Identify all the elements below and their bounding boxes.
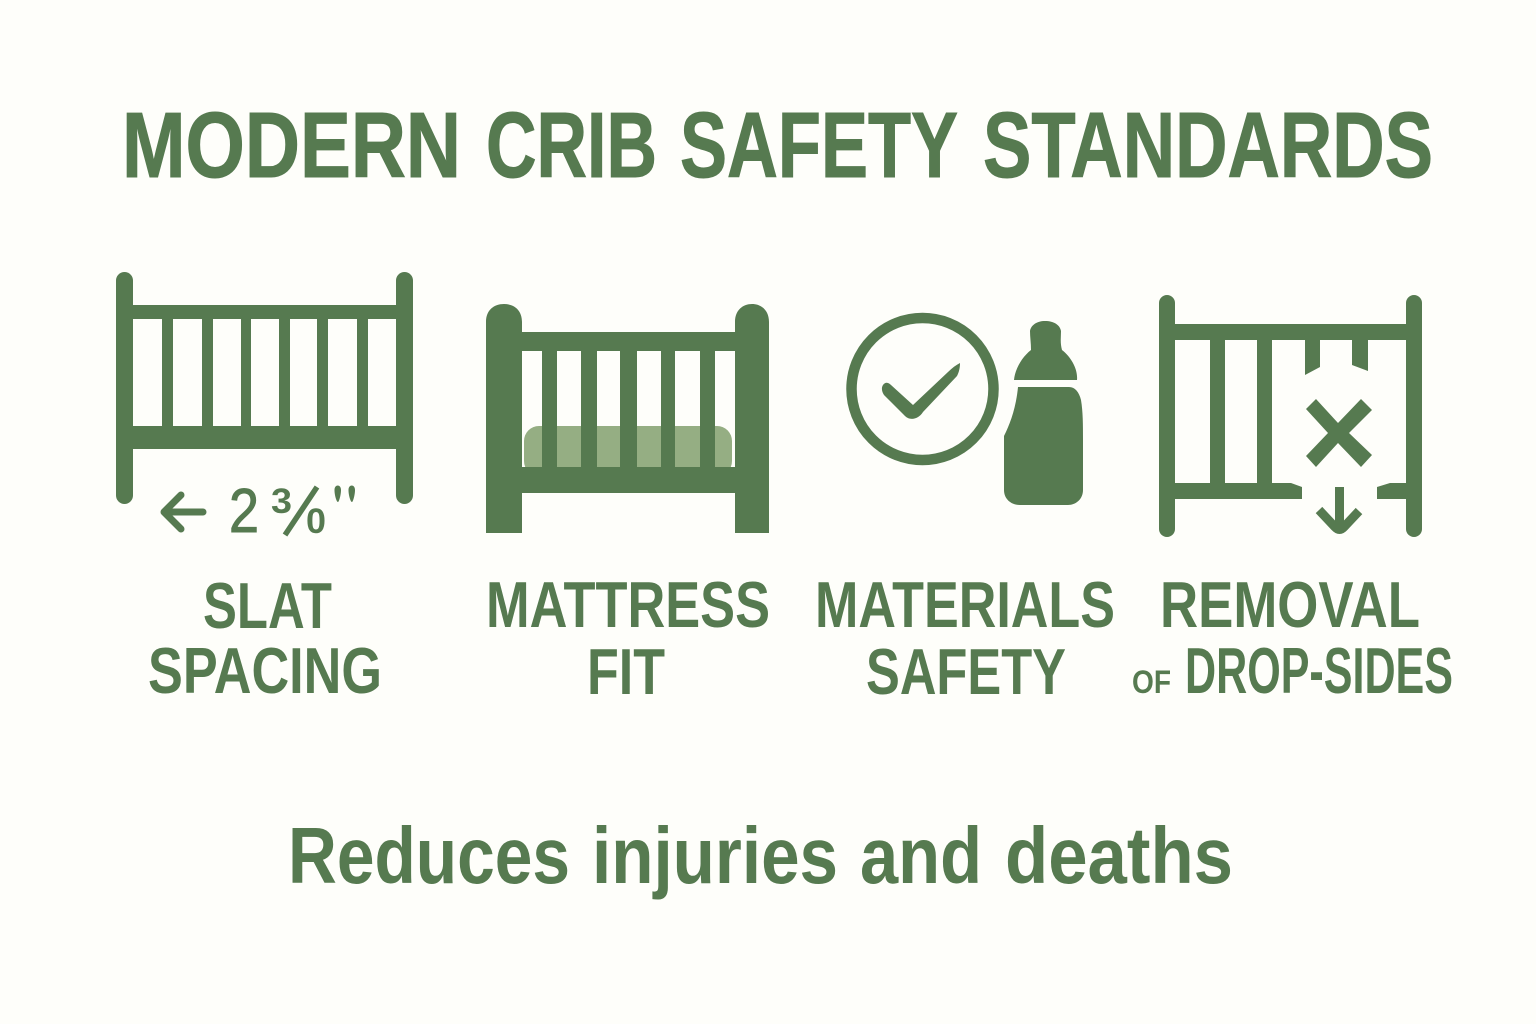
icon: crib with fitted mattress [486,304,769,533]
inch mark [334,486,355,502]
measurement whole number: 2 [229,477,259,546]
measurement fraction: 0 [306,502,326,541]
label: materials safety: MATERIALS [815,568,1115,641]
icon: crib with slat spacing [116,272,413,504]
slat spacing measurement [164,477,355,546]
icon: check circle [852,318,994,460]
label: removal of drop-sides: REMOVAL [1160,568,1420,641]
arrow: spacing width [164,495,203,529]
title: MODERN [122,93,461,197]
tagline: Reduces [288,811,570,900]
tagline: injuries [592,811,838,900]
label: mattress fit: MATTRESS [486,568,770,641]
tagline: and [860,811,982,900]
label: slat spacing: SPACING [148,634,382,707]
label: removal of drop-sides [1132,568,1453,707]
title: SAFETY [680,93,958,197]
icon: x mark [1306,399,1372,467]
label: mattress fit: FIT [587,635,665,708]
arrow: drop-side down [1319,487,1359,530]
label: removal of drop-sides: OF [1132,664,1171,700]
mattress [524,426,732,476]
title: CRIB [486,93,657,197]
label: materials safety [815,568,1115,708]
label: materials safety: SAFETY [866,635,1066,708]
label: slat spacing: SLAT [203,569,332,642]
tagline: deaths [1005,811,1233,900]
measurement fraction: 3 [271,482,292,521]
title [122,93,1433,197]
tagline [288,811,1233,900]
icon: materials safety check and bottle [852,318,1083,505]
label: mattress fit [486,568,770,708]
label: slat spacing [148,569,382,707]
measurement fraction [271,482,326,541]
icon: crib with removed drop-side [1159,295,1422,537]
icon: baby bottle [1004,321,1083,505]
